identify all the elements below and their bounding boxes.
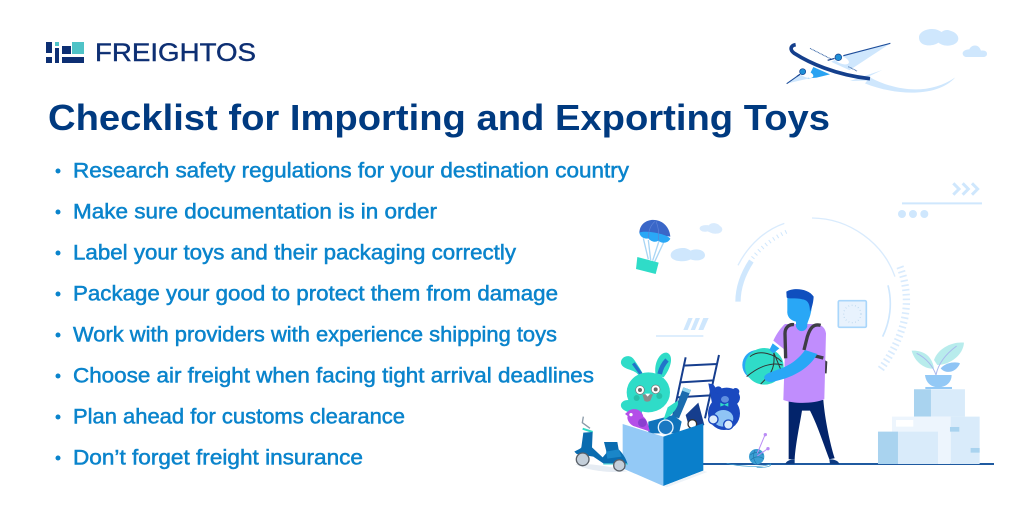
box [623, 423, 771, 487]
checklist: Research safety regulations for your destination country [73, 160, 630, 182]
teddy bear [708, 383, 740, 430]
toys behind the box [621, 353, 740, 435]
ball [742, 350, 772, 380]
head [787, 292, 812, 331]
legs [789, 400, 835, 459]
bunny [621, 353, 678, 420]
pen [672, 387, 691, 418]
purple bird [625, 409, 650, 432]
ground line [703, 463, 994, 465]
checklist: Make sure documentation is in order [73, 200, 437, 224]
scooter [574, 417, 628, 472]
ladder [673, 355, 719, 418]
person with ball [742, 289, 980, 464]
title: Checklist for Importing and Exporting Toys [48, 97, 830, 138]
logo: Freightos [46, 39, 256, 67]
checklist: Choose air freight when facing tight arrival deadlines [73, 364, 594, 388]
airplane trail and clouds [865, 29, 987, 93]
checklist: Package your good to protect them from damage [73, 282, 558, 306]
backpack straps [785, 325, 823, 358]
airplane [787, 43, 891, 84]
fin toy [686, 403, 704, 430]
telescope [648, 415, 682, 433]
checklist: Plan ahead for customs clearance [73, 406, 405, 428]
checklist [56, 160, 630, 470]
yarn ball [727, 433, 771, 467]
decorative dial and chevrons [738, 183, 982, 369]
checklist: Don’t forget freight insurance [73, 446, 363, 470]
arm [764, 343, 817, 382]
checklist: Work with providers with experience shipping toys [73, 324, 557, 346]
checklist: Label your toys and their packaging correctly [73, 242, 517, 264]
parachute crate and clouds [636, 220, 722, 336]
boxes [914, 389, 931, 417]
plant [912, 351, 934, 369]
shirt [773, 324, 826, 403]
backpack side [825, 360, 827, 373]
logo: Freightos: FREIGHTOS [95, 39, 256, 67]
